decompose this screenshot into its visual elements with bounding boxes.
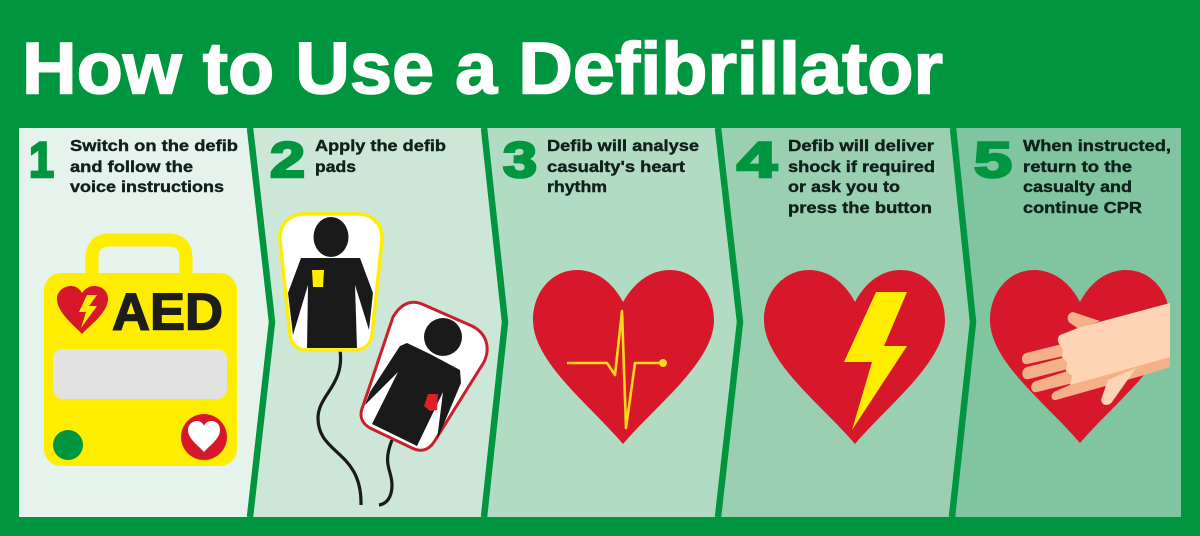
step 5 text	[1023, 138, 1171, 217]
icon: AED device	[44, 240, 237, 466]
icon: heart with ECG trace	[533, 270, 714, 444]
AED shock button	[181, 414, 227, 460]
AED green light	[53, 430, 83, 460]
chevron divider 3	[718, 128, 740, 517]
icon: heart with lightning bolt	[764, 270, 945, 444]
step 3 text: Defib will analyse	[547, 138, 699, 155]
step 5 text: casualty and	[1023, 179, 1132, 196]
step 4 number: 4	[737, 132, 777, 188]
step 3 text	[547, 138, 699, 196]
step 1 text	[70, 138, 238, 196]
panel: step 2 background	[250, 128, 506, 517]
panel: step 4 background	[718, 128, 974, 517]
AED heart logo	[57, 286, 108, 334]
icon: red defib pad	[361, 302, 487, 450]
AED label: AED	[112, 284, 223, 342]
step 5 text: return to the	[1023, 159, 1132, 176]
step 2 text: Apply the defib	[315, 138, 446, 155]
hand: fingers and arm shadow	[1022, 312, 1170, 400]
step 2 text: pads	[315, 159, 356, 176]
step 3 number: 3	[503, 132, 537, 188]
icon: yellow defib pad	[280, 214, 382, 350]
AED handle	[92, 240, 186, 280]
step 4 text: or ask you to	[788, 179, 900, 196]
step 1 text: and follow the	[70, 159, 193, 176]
panel: step 1 background	[19, 128, 273, 517]
step 1 number: 1	[29, 132, 54, 188]
step 2 text	[315, 138, 446, 176]
step 4 text: press the button	[788, 200, 932, 217]
AED body	[44, 273, 237, 466]
icon: cable from yellow pad	[318, 350, 361, 505]
step 2 number: 2	[270, 132, 305, 188]
chevron divider 1	[250, 128, 272, 517]
hand: thumb	[1101, 368, 1136, 405]
chevron divider 2	[484, 128, 505, 517]
step 1 text: voice instructions	[70, 179, 224, 196]
panel: step 3 background	[484, 128, 741, 517]
title: How to Use a Defibrillator	[22, 29, 943, 110]
hand: palm and forearm	[1058, 303, 1170, 385]
AED display	[53, 349, 227, 399]
panel: step 5 background	[952, 128, 1181, 517]
step 3 text: rhythm	[547, 179, 607, 196]
step 5 text: continue CPR	[1023, 200, 1143, 217]
step 4 text: Defib will deliver	[788, 138, 934, 155]
icon: heart with hand	[990, 270, 1170, 443]
step 4 text: shock if required	[788, 159, 935, 176]
step 5 number: 5	[974, 132, 1012, 188]
chevron divider 4	[952, 128, 973, 517]
step 3 text: casualty's heart	[547, 159, 686, 176]
icon: cable from red pad	[379, 440, 392, 505]
step 4 text	[788, 138, 935, 217]
step 5 text: When instructed,	[1023, 138, 1171, 155]
step 1 text: Switch on the defib	[70, 138, 238, 155]
